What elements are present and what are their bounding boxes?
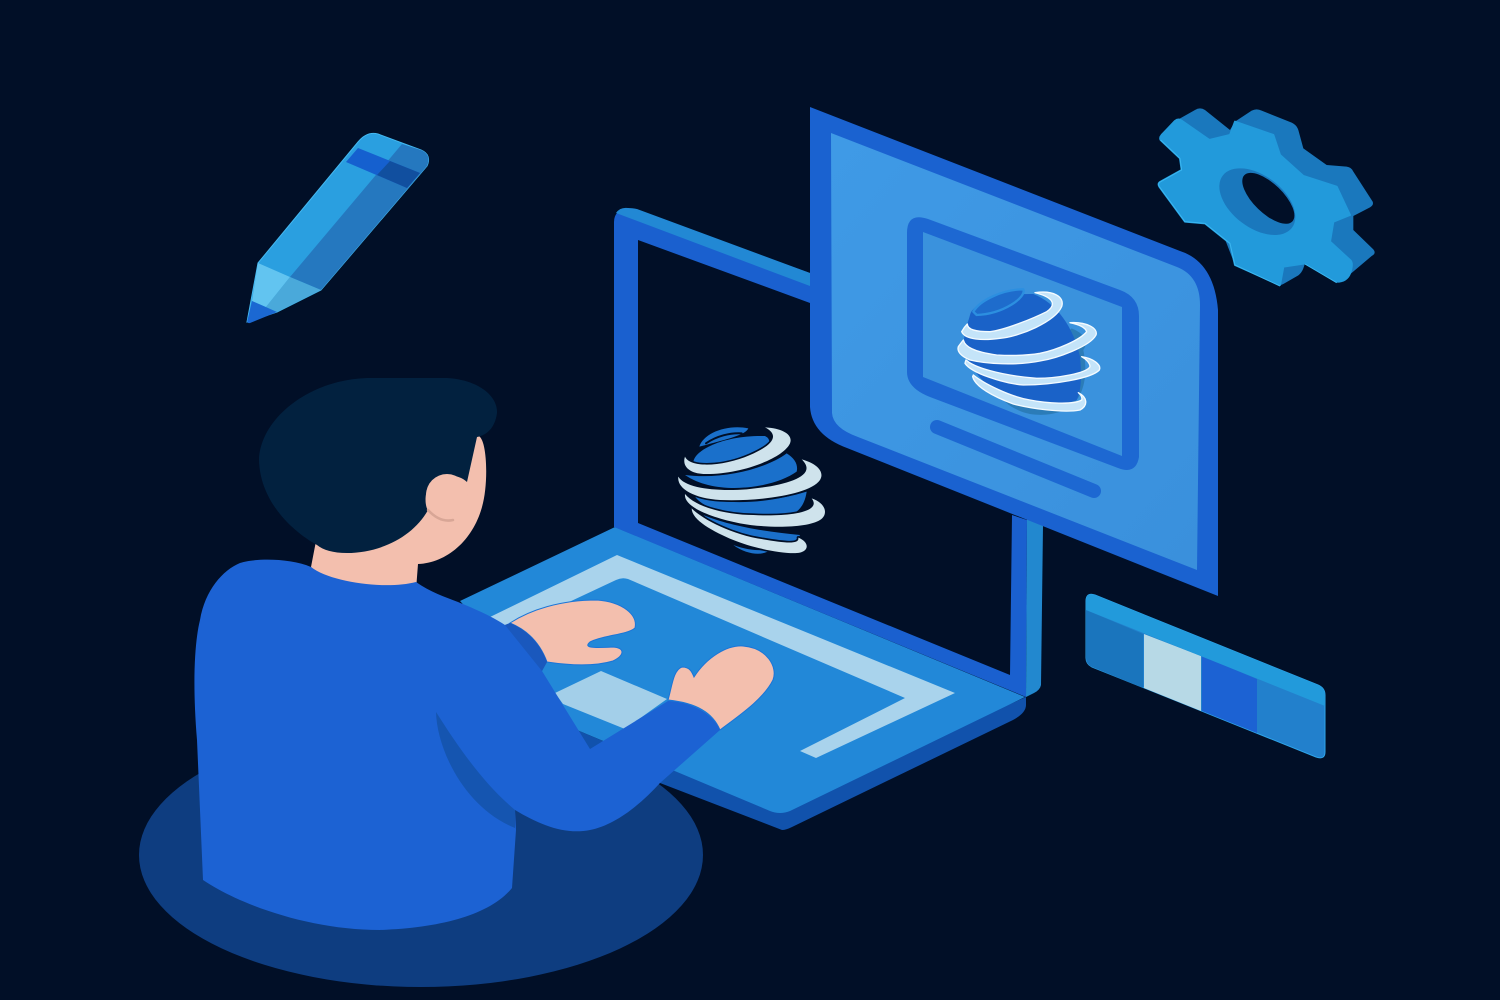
globe on monitor [958, 289, 1100, 415]
sleeve cuff shadow [505, 623, 547, 671]
laptop screen frame [614, 208, 1027, 697]
neck and face [311, 436, 486, 590]
monitor screen [831, 133, 1200, 570]
ear crease [428, 510, 453, 521]
laptop [460, 208, 1043, 830]
sweater [194, 560, 720, 930]
shadow under person [139, 723, 703, 987]
globe bands [685, 427, 807, 554]
keyboard band [490, 555, 955, 758]
color swatch bar [1086, 594, 1325, 758]
sweater fold shadow [436, 712, 515, 828]
gear hole wall [1207, 155, 1308, 249]
laptop frame top edge [616, 208, 810, 286]
swatch 3 [1202, 656, 1257, 733]
gear front face [1159, 120, 1352, 285]
swatch 2 [1144, 634, 1201, 711]
monitor frame [810, 107, 1218, 596]
left hand [510, 600, 635, 665]
gear hole opening [1234, 165, 1302, 232]
globe sphere [964, 294, 1081, 405]
globe rings [958, 292, 1100, 411]
right hand [668, 646, 774, 730]
laptop deck [460, 527, 1025, 813]
globe swirl line [706, 433, 742, 443]
gear side extrusion [1178, 108, 1375, 285]
globe top cap [973, 289, 1024, 315]
globe rings [678, 427, 825, 553]
laptop stand highlight [1026, 519, 1043, 697]
globe shadow [997, 328, 1086, 415]
floating monitor [810, 107, 1218, 596]
ear [426, 474, 468, 516]
monitor inner window [923, 232, 1122, 456]
monitor inner window frame [907, 217, 1139, 470]
swatch header strip [1086, 594, 1325, 706]
hair [259, 378, 497, 553]
icon: pencil [247, 133, 429, 323]
gear edge highlight [1159, 140, 1337, 286]
swatch 1 [1086, 610, 1143, 688]
laptop base underside [577, 697, 1026, 830]
trackpad [555, 671, 667, 729]
icon: gear [1159, 108, 1375, 286]
person [194, 378, 774, 930]
globe on laptop screen [678, 427, 825, 554]
monitor caption bar [937, 427, 1094, 491]
